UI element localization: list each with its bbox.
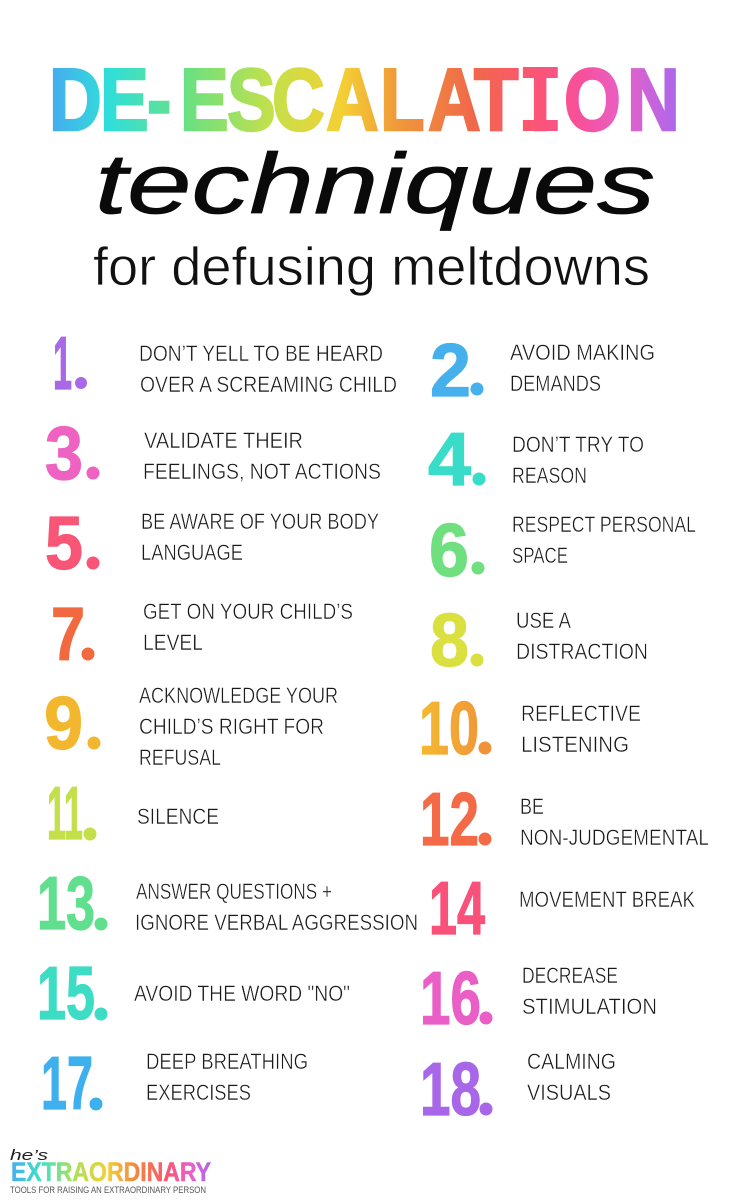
item 6: RESPECT PERSONAL [512, 512, 696, 537]
item 13: IGNORE VERBAL AGGRESSION [135, 910, 418, 935]
item 13: ANSWER QUESTIONS + [136, 879, 332, 904]
item 1 [53, 321, 397, 405]
title: DE-ESCALATION: DE-ESCALATION [49, 52, 680, 150]
item 7: GET ON YOUR CHILD’S [143, 599, 353, 624]
item 6: SPACE [512, 543, 568, 568]
item 6: 6 [429, 508, 469, 592]
item 13 [37, 861, 418, 945]
item 9 [44, 681, 338, 770]
item 3: 3 [45, 411, 83, 495]
item 3: VALIDATE THEIR [144, 428, 303, 453]
item 18 [420, 1047, 616, 1131]
item 9: CHILD’S RIGHT FOR [139, 714, 324, 739]
item 2: 2 [430, 328, 471, 412]
item 5: 5 [45, 501, 83, 585]
item 14: 14 [429, 866, 485, 950]
item 17: EXERCISES [146, 1080, 251, 1105]
item 16: STIMULATION [522, 994, 657, 1019]
item 8: USE A [516, 608, 571, 633]
item 11: SILENCE [137, 804, 219, 829]
item 15: 15 [37, 951, 95, 1035]
item 9: 9 [44, 681, 83, 765]
item 16: 16 [420, 956, 481, 1040]
logo: He's Extraordinary [10, 1147, 211, 1196]
item 4: DON’T TRY TO [512, 432, 644, 457]
item 15 [37, 951, 350, 1035]
item 18: 18 [420, 1047, 481, 1131]
item 2 [430, 328, 655, 412]
item 2: AVOID MAKING [510, 340, 655, 365]
item 17 [41, 1041, 308, 1125]
title: techniques script: techniques [95, 137, 655, 232]
item 8: 8 [430, 598, 469, 682]
item 14 [429, 866, 695, 950]
item 12: BE [520, 794, 544, 819]
item 12: NON-JUDGEMENTAL [520, 825, 709, 850]
item 7 [51, 592, 353, 676]
item 4 [428, 417, 644, 501]
item 10 [419, 686, 641, 770]
item 14: MOVEMENT BREAK [519, 887, 695, 912]
item 6 [429, 508, 696, 592]
item 10: 10 [419, 686, 479, 770]
item 3 [45, 411, 381, 495]
item 1: DON’T YELL TO BE HEARD [139, 341, 383, 366]
item 8 [430, 598, 648, 682]
item 12 [420, 777, 709, 861]
item 1: 1 [53, 321, 72, 405]
item 16: DECREASE [522, 963, 618, 988]
logo: He's Extraordinary: EXTRAORDINARY [11, 1157, 211, 1187]
item 12: 12 [420, 777, 479, 861]
item 9: REFUSAL [139, 745, 221, 770]
item 10: REFLECTIVE [521, 701, 641, 726]
subtitle: for defusing meltdowns [93, 237, 650, 297]
item 13: 13 [37, 861, 95, 945]
item 7: 7 [51, 592, 85, 676]
item 5: BE AWARE OF YOUR BODY [141, 509, 379, 534]
logo: He's Extraordinary: he’s [10, 1147, 49, 1164]
item 5: LANGUAGE [141, 540, 243, 565]
item 4: 4 [428, 417, 471, 501]
item 11: 11 [47, 771, 83, 855]
item 18: CALMING [527, 1049, 616, 1074]
item 1: OVER A SCREAMING CHILD [140, 372, 397, 397]
item 10: LISTENING [521, 732, 629, 757]
item 11 [47, 771, 219, 855]
item 8: DISTRACTION [516, 639, 648, 664]
item 15: AVOID THE WORD "NO" [134, 981, 350, 1006]
item 16 [420, 956, 657, 1040]
item 17: DEEP BREATHING [146, 1049, 308, 1074]
item 7: LEVEL [143, 630, 203, 655]
item 3: FEELINGS, NOT ACTIONS [143, 459, 381, 484]
item 17: 17 [41, 1041, 93, 1125]
item 5 [45, 501, 379, 585]
item 18: VISUALS [527, 1080, 611, 1105]
item 2: DEMANDS [510, 371, 601, 396]
item 9: ACKNOWLEDGE YOUR [139, 683, 338, 708]
item 4: REASON [512, 463, 587, 488]
logo: He's Extraordinary: TOOLS FOR RAISING AN EXTRAORDINARY PERSON [10, 1185, 206, 1196]
